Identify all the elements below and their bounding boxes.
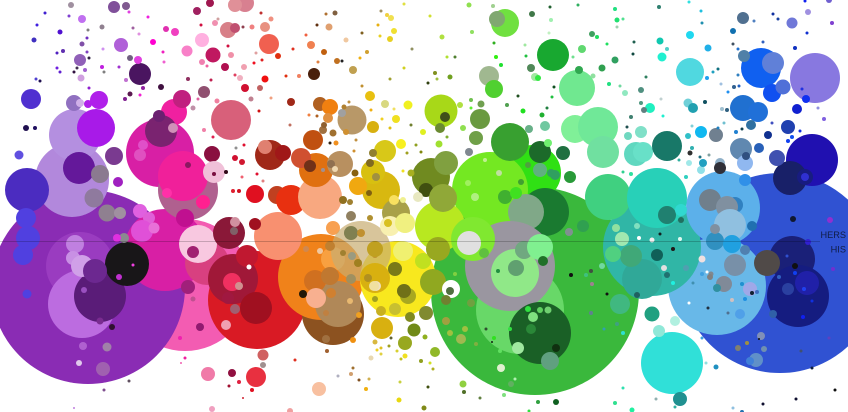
teal cluster	[565, 31, 718, 406]
purple cluster	[5, 1, 151, 376]
green cluster	[408, 9, 631, 405]
yellow cluster	[331, 91, 433, 402]
scattered small dots: centre	[284, 2, 556, 412]
label: hers: HERS	[820, 230, 846, 240]
scattered small dots: left	[23, 10, 274, 409]
detail dots inside the large bubbles	[299, 109, 835, 354]
pink cluster	[126, 0, 254, 412]
red cluster	[208, 22, 306, 399]
orange cluster	[287, 24, 366, 412]
scattered small dots: right	[572, 0, 836, 412]
dividing line	[0, 240, 820, 242]
blue cluster	[697, 9, 840, 367]
large base bubbles	[0, 171, 848, 395]
label: his: HIS	[831, 244, 846, 254]
